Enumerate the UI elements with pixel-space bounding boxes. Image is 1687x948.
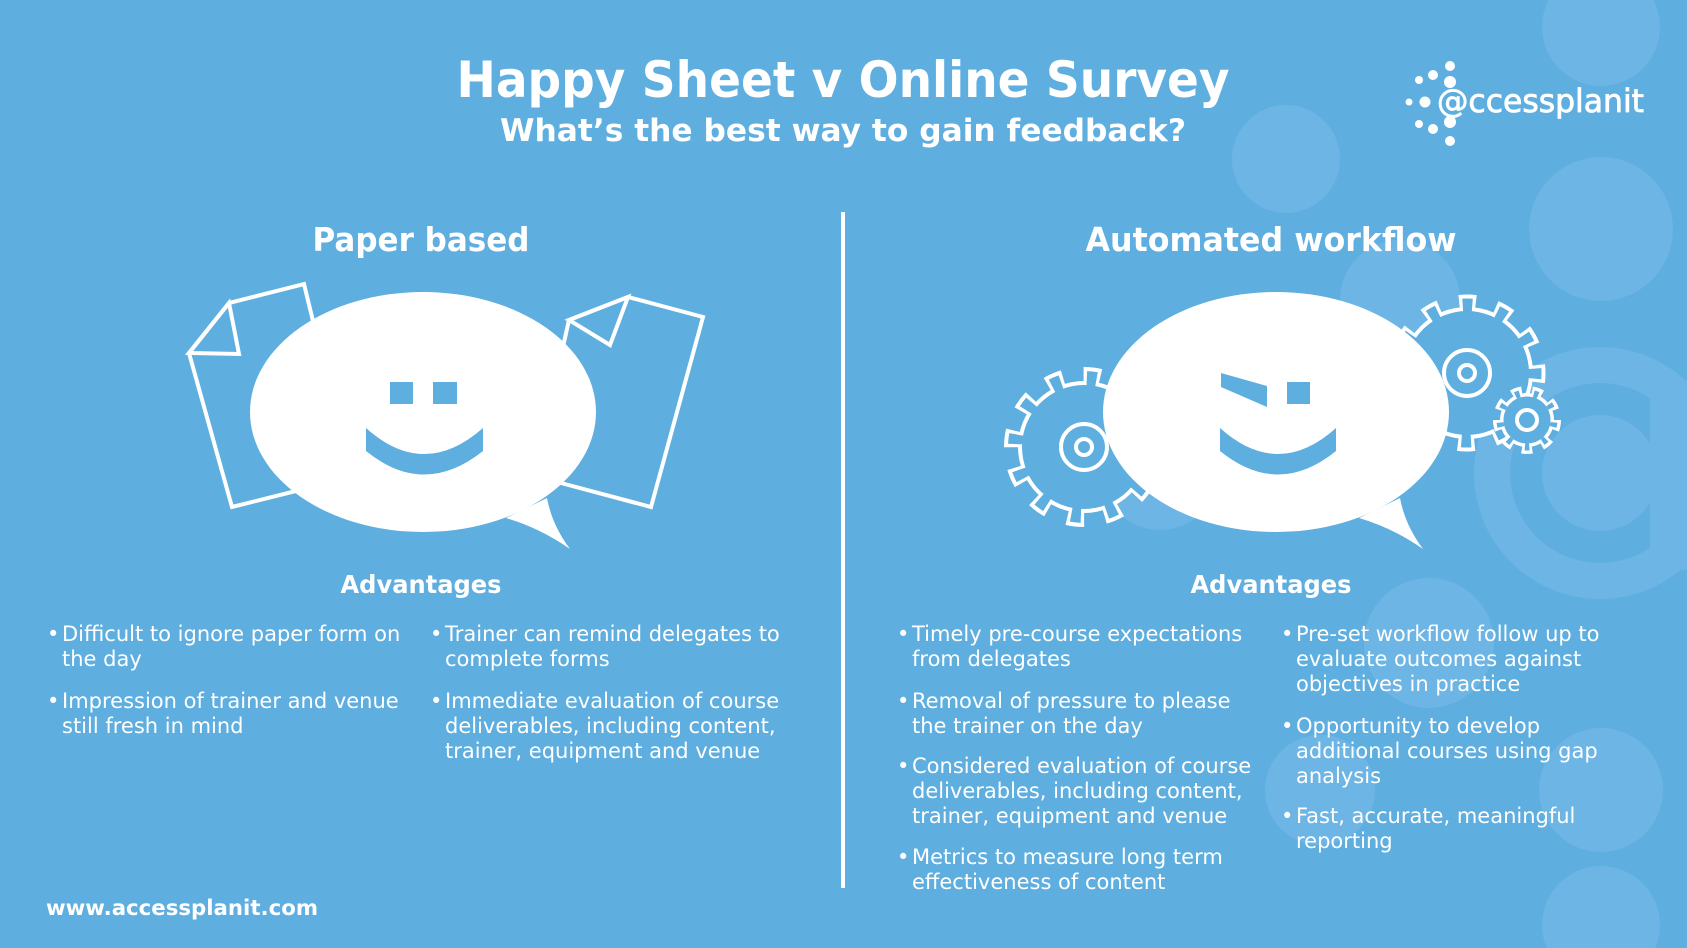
icon: paper sheets (189, 284, 703, 507)
logo (1406, 61, 1644, 146)
icon: workflow bubble wink (1103, 292, 1449, 549)
bullets: paper based: the day (62, 647, 142, 671)
bullets: paper based: • (430, 689, 442, 713)
bullets: automated workflow: effectiveness of content (912, 870, 1165, 894)
heading: paper based: Paper based (312, 220, 530, 259)
bullets: paper based: Impression of trainer and venue (62, 689, 399, 713)
bullets: paper based: trainer, equipment and venue (445, 739, 760, 763)
bullets: automated workflow: • (1281, 804, 1293, 828)
bullets: paper based: still fresh in mind (62, 714, 244, 738)
bullets: paper based (47, 622, 780, 763)
bullets: automated workflow: objectives in practice (1296, 672, 1520, 696)
bullets: automated workflow: evaluate outcomes against (1296, 647, 1581, 671)
bullets: automated workflow: trainer, equipment and venue (912, 804, 1227, 828)
bullets: automated workflow: Metrics to measure long term (912, 845, 1223, 869)
bullets: automated workflow: additional courses using gap (1296, 739, 1598, 763)
divider (841, 212, 845, 888)
bullets: automated workflow: from delegates (912, 647, 1071, 671)
small right gear (1497, 390, 1557, 450)
bullets: automated workflow: Opportunity to develop (1296, 714, 1540, 738)
bullets: automated workflow: Pre-set workflow follow up to (1296, 622, 1600, 646)
bullets: automated workflow: Fast, accurate, meaningful (1296, 804, 1575, 828)
heading: automated workflow: Automated workflow (1086, 220, 1456, 259)
bullets: automated workflow: • (1281, 622, 1293, 646)
bullets: automated workflow: • (897, 622, 909, 646)
left gear (1012, 375, 1156, 519)
heading: advantages left: Advantages (340, 570, 502, 599)
bullets: automated workflow: Considered evaluation of course (912, 754, 1251, 778)
title: Happy Sheet v Online Survey (456, 51, 1230, 109)
bullets: automated workflow: • (1281, 714, 1293, 738)
logo: @ccessplanit (1437, 82, 1644, 120)
bullets: paper based: • (430, 622, 442, 646)
bullets: automated workflow (897, 622, 1600, 894)
heading: advantages right: Advantages (1190, 570, 1352, 599)
bullets: paper based: Trainer can remind delegates to (444, 622, 780, 646)
bullets: automated workflow: deliverables, including content, (912, 779, 1243, 803)
icon: gears (1012, 302, 1557, 519)
bullets: automated workflow: reporting (1296, 829, 1393, 853)
bullets: automated workflow: analysis (1296, 764, 1381, 788)
bullets: automated workflow: Timely pre-course expectations (911, 622, 1242, 646)
bullets: paper based: complete forms (445, 647, 610, 671)
bullets: paper based: Immediate evaluation of course (445, 689, 779, 713)
big right gear (1396, 302, 1538, 444)
bullets: paper based: • (47, 622, 59, 646)
subtitle: What’s the best way to gain feedback? (500, 113, 1186, 149)
bullets: automated workflow: Removal of pressure to please (912, 689, 1231, 713)
bullets: automated workflow: the trainer on the day (912, 714, 1143, 738)
icon: paper bubble smiley (250, 292, 596, 549)
bullets: automated workflow: • (897, 845, 909, 869)
bullets: paper based: deliverables, including content, (445, 714, 776, 738)
bullets: paper based: • (47, 689, 59, 713)
footer url: www.accessplanit.com (46, 896, 318, 920)
bullets: paper based: Difficult to ignore paper form on (62, 622, 400, 646)
bullets: automated workflow: • (897, 754, 909, 778)
bullets: automated workflow: • (897, 689, 909, 713)
